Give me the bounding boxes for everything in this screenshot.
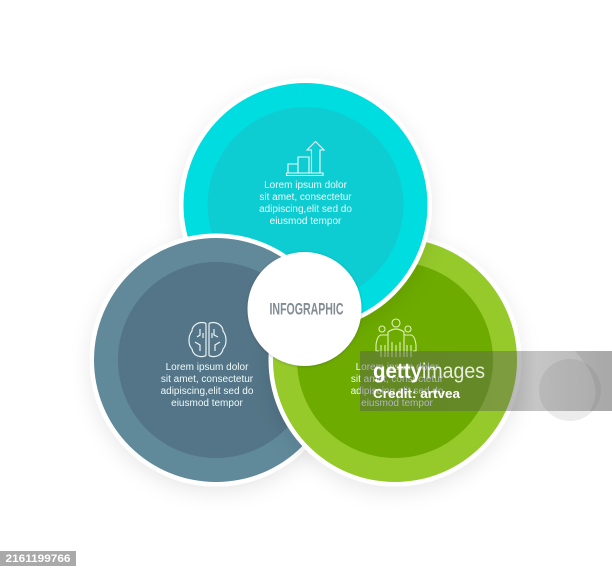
image id badge (0, 551, 76, 566)
icon: brain (189, 323, 226, 357)
text: green circle body: Lorem ipsum dolor (356, 362, 439, 373)
text: teal circle body: adipiscing,elit sed do (259, 204, 352, 215)
center circle (248, 252, 362, 366)
text: teal circle body: eiusmod tempor (270, 216, 342, 227)
watermark band (360, 351, 612, 421)
watermark band: images (422, 360, 485, 383)
panel: green circle (268, 234, 522, 486)
text: slate circle body: Lorem ipsum dolor (166, 362, 249, 373)
text: teal circle body: sit amet, consectetur (259, 192, 352, 203)
text: green circle body (351, 362, 444, 409)
text: slate circle body: eiusmod tempor (171, 398, 244, 409)
watermark band: getty (373, 360, 422, 383)
slate circle overlap on teal (96, 234, 286, 340)
icon: group of people (376, 319, 416, 357)
text: green circle body: adipiscing,elit sed do (351, 386, 444, 397)
heading: infographic: INFOGRAPHIC (270, 300, 344, 318)
text: slate circle body: sit amet, consectetur (161, 374, 254, 385)
icon: rising bars and arrow (286, 142, 324, 176)
text: green circle body: eiusmod tempor (361, 398, 434, 409)
text: slate circle body: adipiscing,elit sed do (161, 386, 254, 397)
image id badge: 2161199766 (6, 553, 70, 565)
panel: slate circle (90, 234, 342, 486)
text: teal circle body: Lorem ipsum dolor (264, 180, 348, 191)
text: green circle body: sit amet, consectetur (351, 374, 444, 385)
panel: teal circle (179, 78, 432, 332)
text: slate circle body (161, 362, 254, 409)
watermark band: Credit: artvea (373, 386, 461, 401)
text: teal circle body (259, 180, 352, 227)
